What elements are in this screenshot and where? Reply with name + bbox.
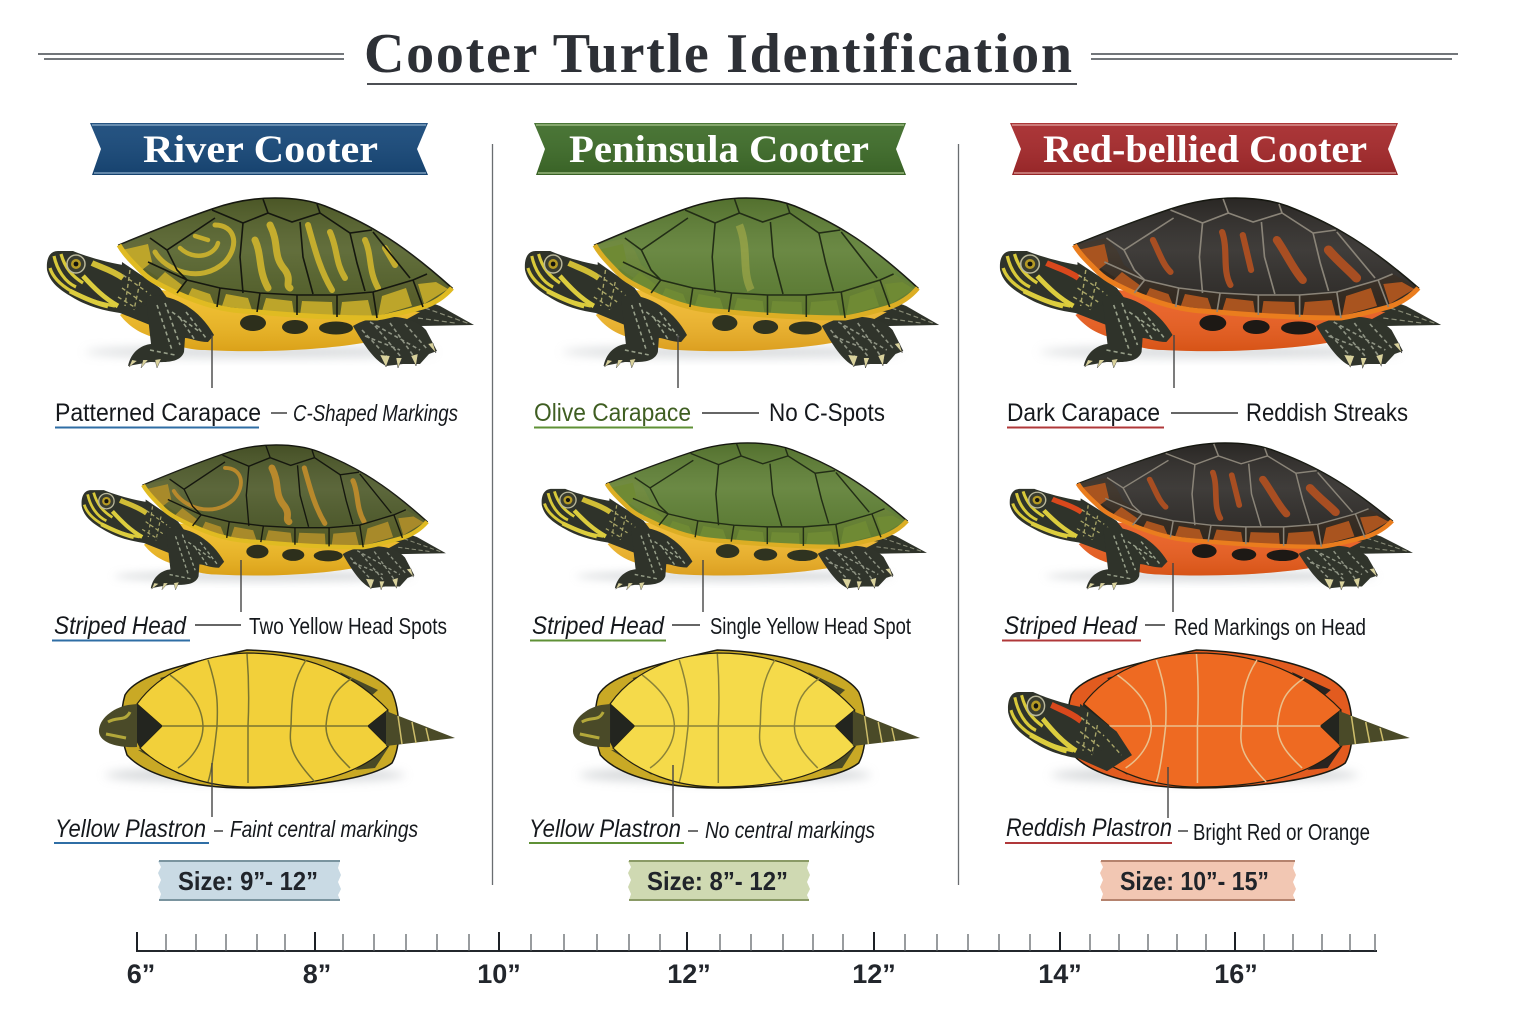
title: Cooter Turtle Identification: [364, 23, 1072, 85]
turtle: striped head: [1010, 443, 1413, 590]
banner: River Cooter: [90, 123, 428, 175]
turtle: yellow plastron: [573, 650, 920, 788]
callout: Olive Carapace: [534, 335, 885, 428]
size ruler: 6”: [127, 959, 155, 989]
size ruler: 12”: [667, 959, 711, 989]
callout: Yellow Plastron: Yellow Plastron: [529, 815, 681, 843]
turtle: patterned carapace: [47, 198, 474, 368]
size ruler: 12”: [852, 959, 896, 989]
callout: Reddish Plastron: Bright Red or Orange: [1193, 819, 1370, 845]
callout: Yellow Plastron: No central markings: [705, 817, 875, 843]
callout: Patterned Carapace: [55, 335, 458, 428]
callout: Yellow Plastron: Faint central markings: [230, 816, 418, 842]
callout: Striped Head: [530, 560, 911, 640]
turtle: olive carapace: [525, 198, 939, 368]
callout: Striped Head: [1002, 563, 1366, 640]
size ruler: 8”: [303, 959, 331, 989]
size tag: River: [158, 861, 341, 900]
panel: River Cooter: [47, 123, 474, 900]
callout: Dark Carapace: [1007, 335, 1408, 428]
callout: Striped Head: Red Markings on Head: [1174, 614, 1366, 640]
panel: Red-bellied Cooter: [1000, 123, 1441, 900]
size tag: River: Size: 9”- 12”: [178, 866, 318, 896]
banner: Red-bellied Cooter: Red-bellied Cooter: [1043, 128, 1367, 171]
callout: Dark Carapace: Dark Carapace: [1007, 399, 1160, 427]
callout: Olive Carapace: No C-Spots: [769, 399, 885, 427]
callout: Dark Carapace: Reddish Streaks: [1246, 399, 1408, 427]
banner: Peninsula Cooter: Peninsula Cooter: [569, 128, 869, 171]
turtle: reddish plastron: [1008, 650, 1410, 788]
banner: Peninsula Cooter: [534, 123, 906, 175]
turtle: dark carapace: [1000, 198, 1441, 368]
panel: Peninsula Cooter: [525, 123, 939, 900]
banner: Red-bellied Cooter: [1010, 123, 1398, 175]
size ruler: 14”: [1038, 959, 1082, 989]
callout: Reddish Plastron: Reddish Plastron: [1006, 814, 1172, 842]
banner: River Cooter: River Cooter: [143, 128, 378, 171]
size ruler: [127, 932, 1377, 989]
turtle: striped head: [542, 443, 927, 590]
size tag: Peninsula: [628, 861, 810, 900]
callout: Patterned Carapace: C-Shaped Markings: [293, 400, 458, 426]
turtle: yellow plastron: [99, 650, 455, 788]
size tag: Red-bellied: Size: 10”- 15”: [1120, 866, 1269, 896]
callout: Yellow Plastron: [54, 763, 418, 843]
callout: Striped Head: Striped Head: [532, 612, 665, 640]
callout: Striped Head: Striped Head: [54, 612, 187, 640]
callout: Olive Carapace: Olive Carapace: [534, 399, 691, 427]
callout: Yellow Plastron: [529, 765, 875, 843]
callout: Reddish Plastron: [1005, 767, 1370, 845]
size ruler: 16”: [1214, 959, 1258, 989]
callout: Striped Head: Single Yellow Head Spot: [710, 613, 911, 639]
callout: Yellow Plastron: Yellow Plastron: [55, 815, 206, 843]
callout: Striped Head: Two Yellow Head Spots: [249, 613, 447, 639]
size ruler: 10”: [477, 959, 521, 989]
size tag: Red-bellied: [1100, 861, 1296, 900]
turtle: striped head: [82, 445, 446, 590]
callout: Striped Head: [52, 560, 447, 640]
callout: Striped Head: Striped Head: [1004, 612, 1138, 640]
size tag: Peninsula: Size: 8”- 12”: [647, 866, 788, 896]
callout: Patterned Carapace: Patterned Carapace: [55, 399, 261, 427]
